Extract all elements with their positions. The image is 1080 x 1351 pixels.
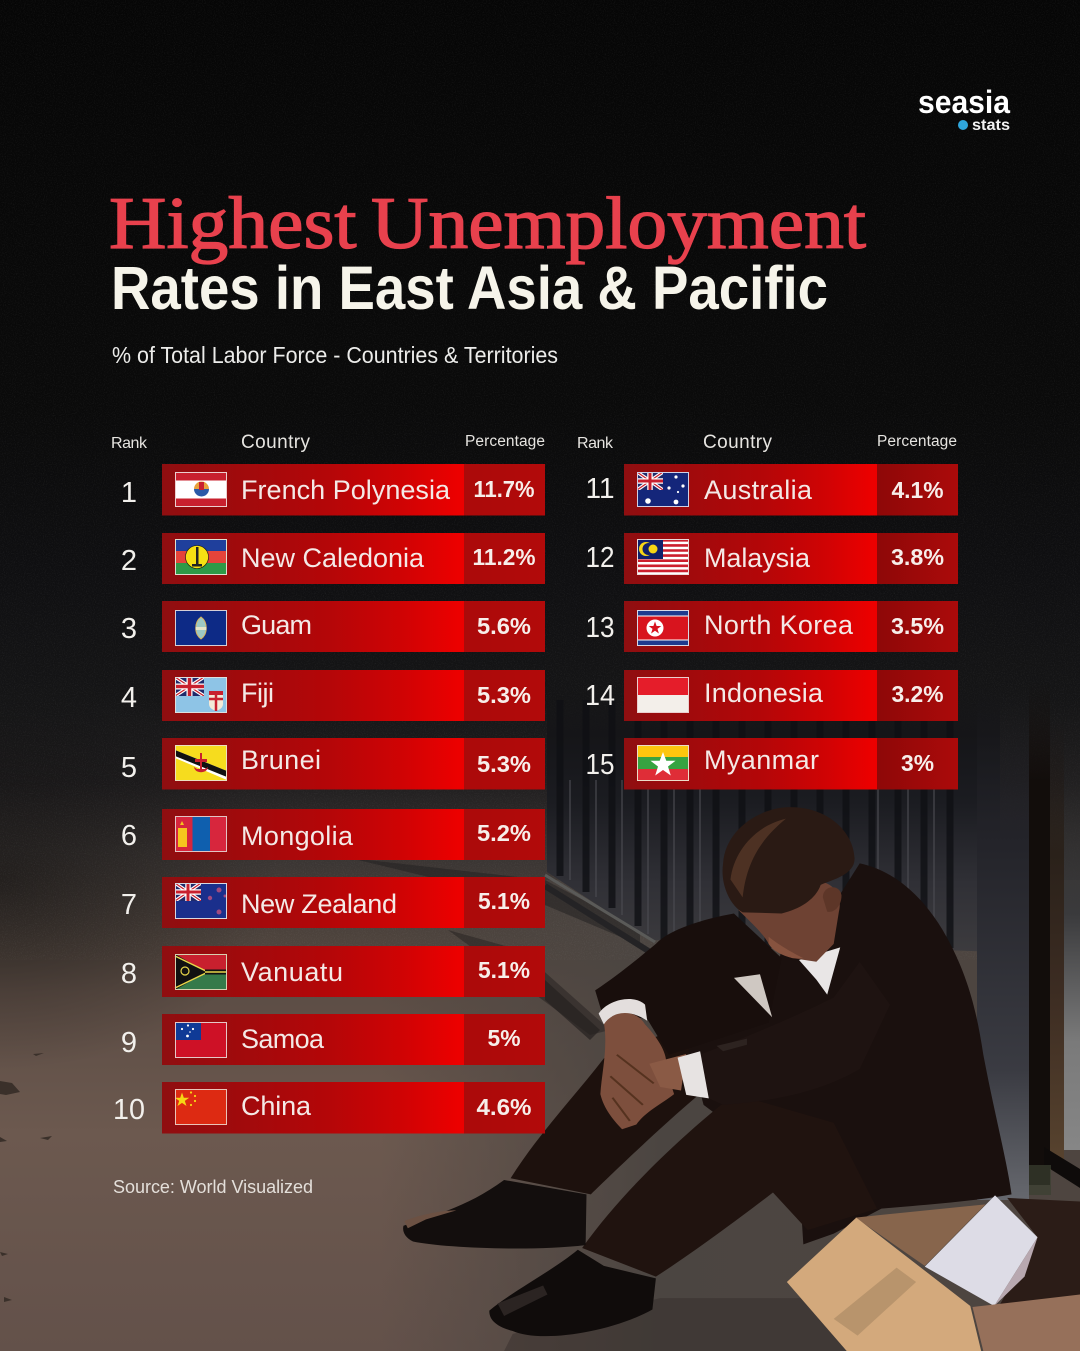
row 5: Brunei [121, 738, 545, 790]
row 5: Brunei: 5.3% [477, 751, 531, 777]
row 7: New Zealand: 7 [121, 889, 137, 921]
row 12: Malaysia: Malaysia [704, 543, 811, 573]
row 12: Malaysia: 12 [586, 542, 614, 574]
row 6: Mongolia: 6 [121, 820, 137, 852]
flag: Guam [175, 610, 227, 646]
row 8: Vanuatu: Vanuatu [241, 957, 343, 987]
flag: New Zealand [175, 883, 227, 919]
near sleeve [699, 962, 890, 1105]
row 10: China: 4.6% [476, 1094, 532, 1120]
row 11: Australia: 11 [586, 473, 614, 505]
shirt gap under arm [734, 974, 772, 1017]
right column headers: Percentage [877, 433, 957, 450]
left column headers: Country [241, 432, 310, 453]
brand logo: seasia stats: stats [972, 117, 1010, 134]
flag: Brunei [175, 745, 227, 781]
row 15: Myanmar [586, 738, 958, 790]
row 5: Brunei: 5 [121, 752, 137, 784]
right column headers: Country [703, 432, 772, 453]
near leg [582, 1098, 877, 1277]
row 12: Malaysia: 3.8% [891, 544, 944, 570]
row 6: Mongolia: 5.2% [477, 820, 531, 846]
row 11: Australia: Australia [704, 475, 813, 505]
ear [823, 887, 842, 912]
row 1: French Polynesia [121, 464, 545, 516]
row 14: Indonesia: 3.2% [892, 681, 944, 707]
row 8: Vanuatu: 8 [121, 958, 137, 990]
shirt cuffs [678, 1051, 709, 1098]
row 3: Guam: Guam [241, 610, 312, 640]
row 2: New Caledonia: 2 [121, 545, 137, 577]
row 9: Samoa: 5% [488, 1025, 520, 1051]
flag: Fiji [175, 677, 227, 713]
row 3: Guam: 3 [121, 613, 137, 645]
row 10: China [113, 1082, 545, 1134]
row 9: Samoa [121, 1014, 545, 1065]
logo dot [958, 120, 968, 130]
flag: Myanmar [637, 745, 689, 781]
title: Highest Unemployment [109, 183, 866, 265]
row 7: New Zealand: 5.1% [478, 888, 530, 914]
left column headers [111, 432, 545, 453]
row 4: Fiji: Fiji [241, 678, 274, 708]
row 10: China: 10 [113, 1094, 145, 1126]
flag: French Polynesia [175, 472, 227, 507]
flag: Samoa [175, 1022, 227, 1058]
row 9: Samoa: Samoa [241, 1024, 325, 1054]
row 4: Fiji [121, 670, 545, 721]
row 3: Guam: 5.6% [477, 613, 531, 639]
row 13: North Korea [586, 601, 958, 652]
face [738, 881, 840, 962]
row 4: Fiji: 5.3% [477, 682, 531, 708]
row 4: Fiji: 4 [121, 682, 137, 714]
background: pillar and window frame [977, 680, 1080, 1200]
row 14: Indonesia [585, 670, 958, 721]
flag: Indonesia [637, 677, 689, 713]
far leg [511, 1026, 712, 1194]
row 6: Mongolia [121, 809, 545, 860]
row 2: New Caledonia: New Caledonia [241, 543, 425, 573]
brand logo: seasia stats [918, 84, 1010, 134]
flag: Mongolia [175, 816, 227, 852]
row 13: North Korea: 3.5% [891, 613, 944, 639]
row 2: New Caledonia [121, 533, 545, 584]
row 11: Australia: 4.1% [892, 477, 944, 503]
left column headers: Percentage [465, 433, 545, 450]
shirt collar [799, 947, 840, 995]
row 3: Guam [121, 601, 545, 652]
row 6: Mongolia: Mongolia [241, 821, 354, 851]
title: Rates in East Asia & Pacific [111, 254, 828, 322]
shadow on floor [504, 1298, 851, 1351]
source note: Source: World Visualized [113, 1177, 313, 1197]
shoes [403, 1180, 586, 1249]
row 8: Vanuatu [121, 946, 545, 997]
flag: Australia [637, 472, 689, 507]
background: railing fence [545, 680, 1000, 952]
flag: North Korea [637, 610, 689, 646]
row 11: Australia [586, 464, 958, 516]
row 1: French Polynesia: French Polynesia [241, 475, 451, 505]
row 15: Myanmar: 3% [901, 750, 934, 776]
row 8: Vanuatu: 5.1% [478, 957, 530, 983]
row 15: Myanmar: Myanmar [704, 745, 819, 775]
row 7: New Zealand [121, 877, 545, 928]
row 13: North Korea: 13 [586, 612, 614, 644]
hair [723, 807, 855, 913]
far arm sleeve [595, 913, 782, 1055]
row 14: Indonesia: Indonesia [704, 678, 824, 708]
row 12: Malaysia [586, 533, 958, 584]
subtitle: % of Total Labor Force - Countries & Territories [112, 342, 558, 368]
flag: China [175, 1089, 227, 1125]
photo: man sitting with head down beside a cardboard box [403, 807, 1080, 1351]
right column headers [577, 432, 957, 453]
row 9: Samoa: 9 [121, 1027, 137, 1059]
brand logo: seasia stats: seasia [918, 84, 1010, 120]
jacket body [686, 863, 1012, 1244]
right column headers: Rank [577, 435, 614, 452]
flag: New Caledonia [175, 539, 227, 575]
row 10: China: China [241, 1091, 312, 1121]
row 2: New Caledonia: 11.2% [472, 544, 536, 570]
row 15: Myanmar: 15 [586, 749, 614, 781]
left column headers: Rank [111, 435, 148, 452]
row 13: North Korea: North Korea [704, 610, 854, 640]
row 5: Brunei: Brunei [241, 745, 321, 775]
flag: Malaysia [637, 539, 689, 575]
row 7: New Zealand: New Zealand [241, 889, 397, 919]
title [109, 183, 866, 322]
cardboard box [999, 1198, 1080, 1307]
sleeve buttons [717, 1039, 747, 1051]
row 14: Indonesia: 14 [585, 680, 615, 712]
row 1: French Polynesia: 11.7% [474, 476, 534, 502]
row 1: French Polynesia: 1 [121, 477, 137, 509]
flag: Vanuatu [175, 954, 227, 990]
hands [600, 1013, 674, 1129]
